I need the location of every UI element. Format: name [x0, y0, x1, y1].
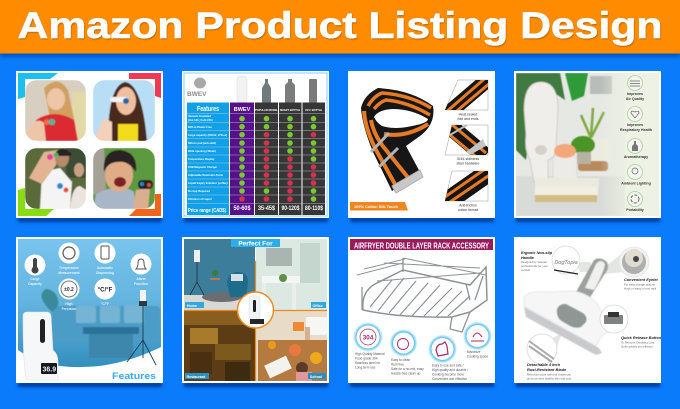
- table labels: Temperature Display: [188, 157, 215, 161]
- header banner: [0, 0, 680, 54]
- table labels: (Hot 12h; Cold 24h): [188, 118, 213, 122]
- text: quick release: To Remove Shedding Coat: [621, 340, 655, 344]
- text: convenient eyelet: Hook or hang in front rack: [624, 286, 657, 290]
- feature: celsius fahrenheit: [94, 278, 116, 306]
- features label: Features: [112, 371, 156, 382]
- text: convenient eyelet: Convenient Eyelet: [624, 277, 658, 282]
- text: quick release: Quite quickly and efficient: [621, 344, 653, 348]
- feature: easy to clean: Rust free: [391, 362, 404, 366]
- feature: alarm function: Function: [134, 282, 148, 286]
- feature: easy to use: Easy to use and safe /: [432, 364, 464, 368]
- photo: office: Office: [312, 304, 323, 308]
- benefit: air quality: Air Quality: [626, 97, 644, 101]
- benefit: aromatherapy: Aromatherapy: [624, 155, 648, 159]
- detail: heat sealed: [444, 80, 488, 120]
- table labels: Silicon pad (anti-skid): [188, 141, 216, 145]
- cross marks: [239, 132, 316, 202]
- photo: smiling boy: [93, 148, 155, 209]
- badge: cotton silk touch: 100% Cotton Silk Touch: [354, 204, 399, 209]
- benefit: portability: Portability: [626, 208, 644, 212]
- feature: 304 steel: Long term use: [355, 366, 376, 370]
- table labels: 35-45$: [258, 206, 276, 212]
- text: expanic handle: Designed by Veteran: [521, 260, 547, 264]
- table labels: BWEV: [234, 107, 251, 113]
- row separators: [187, 114, 325, 204]
- header banner: Amazon Product Listing Design: [18, 6, 664, 48]
- benefit: portability: [626, 192, 644, 212]
- feature: 304 steel: High Quality Material: [355, 352, 385, 356]
- perfect for tag: [231, 239, 280, 248]
- table labels: USB Magnetic Charger: [188, 165, 217, 169]
- benefit: aromatherapy: [624, 138, 648, 159]
- feature: large capacity: Large: [31, 277, 40, 281]
- feature: large capacity: [24, 254, 46, 286]
- table labels: Price range (CAD$): [188, 208, 226, 214]
- living room background: [18, 239, 161, 367]
- feature: automatic dispensing: [94, 242, 116, 275]
- benefit: ambient lighting: [621, 164, 651, 186]
- rack title: AIRFRYER DOUBLE LAYER RACK ACCESSORY: [354, 240, 489, 250]
- perfect for tag: Perfect For: [238, 240, 273, 248]
- panel: air purifying decor: [514, 71, 661, 218]
- tile shadows: [18, 217, 660, 387]
- dividers: [184, 261, 327, 381]
- check marks: [239, 116, 316, 202]
- table labels: Vacuum Insulated: [188, 114, 211, 118]
- feature: easy to use: Cooking become more: [432, 372, 464, 376]
- feature: cooking space: Maximize: [467, 350, 481, 354]
- product bottles: [237, 76, 317, 103]
- photo: man with spinner: [25, 148, 86, 209]
- table labels: Adjustable Reminder Alarm: [188, 173, 224, 177]
- text: convenient eyelet: For easy storage options: [624, 282, 655, 286]
- text: quick release: Quick Release Button: [621, 335, 662, 340]
- callout: release button detail: [600, 305, 628, 333]
- text: quick release: [621, 335, 662, 348]
- text: detachable blade: [527, 362, 571, 380]
- detail: anti-friction: Anti-friction: [459, 204, 477, 208]
- feature: large capacity: Capacity: [28, 282, 42, 286]
- photo: restaurant: [184, 311, 255, 381]
- photo: restaurant: Restaurant: [186, 375, 206, 379]
- table labels: 90-120$: [282, 206, 300, 212]
- buckle hardware: [371, 133, 423, 193]
- photo: office: [256, 239, 327, 310]
- feature: high precision: Precision: [62, 307, 76, 311]
- photo: home: Home: [187, 304, 197, 308]
- detail: heat sealed: Heat sealed: [459, 112, 477, 116]
- benefit: respiratory health: Improves: [627, 123, 643, 127]
- feature: celsius fahrenheit: °C/°F: [101, 302, 109, 306]
- center opening of loop: [374, 109, 428, 128]
- table labels: Filtration of Liquid: [188, 197, 212, 201]
- panel: dispenser features: [16, 237, 163, 383]
- feature: 304 steel: Stainless steel for: [355, 361, 381, 365]
- photo: girl in red: [25, 80, 86, 141]
- table backgrounds: [187, 102, 325, 215]
- feature: temperature measurement: [58, 242, 81, 275]
- rack illustration: [357, 258, 487, 332]
- photo: school: [256, 311, 327, 381]
- benefit: air quality: [626, 76, 644, 101]
- feature: easy to clean: Hassle-free clean up: [391, 372, 420, 376]
- dispenser badge: [238, 292, 274, 328]
- table labels: Features: [197, 104, 219, 113]
- detail: anti-friction: cotton thread: [458, 208, 478, 212]
- feature: easy to clean: Safe for a no-mix, easy: [391, 367, 424, 371]
- feature: 304 steel: 304: [363, 334, 374, 342]
- feature: celsius fahrenheit: °C/°F: [98, 288, 113, 294]
- feature: temperature measurement: Measurement: [58, 271, 81, 275]
- feature: high precision: High: [65, 302, 73, 306]
- table labels: Large capacity (500ml; 17fl.oz): [188, 133, 227, 137]
- table labels: [188, 104, 324, 214]
- panel: nylon watch strap: [348, 71, 496, 218]
- feature: alarm function: [130, 254, 152, 286]
- feature: temperature measurement: Temperature: [59, 266, 79, 270]
- text: expanic handle: comfort: [521, 268, 531, 272]
- text: expanic handle: Handle: [521, 255, 535, 260]
- text: expanic handle: professionals for your: [521, 264, 548, 268]
- table labels: Liquid Expiry Indicator (coffee): [188, 181, 228, 185]
- feature: automatic dispensing: Dispensing: [96, 271, 114, 275]
- detail: heat sealed: fold and ends: [457, 117, 479, 121]
- photo: home: [184, 239, 255, 310]
- rack title: [350, 239, 493, 250]
- photo: school: School: [310, 375, 322, 379]
- text: convenient eyelet: [624, 277, 658, 290]
- table labels: UV-C BOTTLE: [305, 108, 322, 112]
- tripod stand: [127, 306, 156, 365]
- table labels: SMART BOTTLE: [280, 108, 300, 112]
- feature: high precision: [58, 278, 80, 311]
- table labels: No App Required: [188, 189, 210, 193]
- table labels: 80-110$: [305, 206, 324, 212]
- callout: blade detail: [527, 334, 557, 364]
- detail: anti-friction: [444, 170, 488, 211]
- table labels: BPA & Plastic Free: [188, 125, 212, 129]
- header banner: Amazon Product Listing Design: [18, 5, 662, 46]
- table labels: POPULAR MODEL: [255, 108, 278, 112]
- panel: perfect for: [182, 237, 329, 383]
- brush illustration: [524, 258, 611, 355]
- detail: stainless hardware: [444, 123, 488, 166]
- dispenser device: 36.9: [42, 366, 56, 374]
- feature: automatic dispensing: Automatic: [97, 266, 113, 270]
- benefit: ambient lighting: Ambient Lighting: [621, 182, 651, 186]
- callout: handle detail: DogTopia: [554, 260, 578, 266]
- feature: easy to clean: Easy to clean: [391, 358, 410, 362]
- table labels: Wide opening (40mm): [188, 149, 216, 153]
- feature: high precision: ±0.2: [64, 287, 74, 293]
- text: detachable blade: and promotes healthy skin and coat: [527, 376, 571, 380]
- lifestyle photo: [516, 73, 659, 216]
- table labels: 50-60$: [234, 206, 251, 212]
- panel: airfryer rack: [348, 237, 495, 383]
- feature: alarm function: Alarm: [136, 277, 146, 281]
- feature: cooking space: [463, 322, 492, 358]
- callout: eyelet detail: [619, 247, 649, 277]
- colored corner accents: [18, 73, 161, 216]
- logo: BWEV: BWEV: [187, 91, 207, 98]
- detail: stainless hardware: steel hardware: [457, 162, 480, 166]
- benefit: respiratory health: Respiratory Health: [620, 128, 652, 132]
- panel: pet grooming tool: [514, 237, 662, 383]
- feature: easy to use: [428, 334, 468, 381]
- photo: girl in yellow: [93, 80, 155, 141]
- front band stripes: [364, 111, 428, 186]
- dispenser device: [23, 312, 58, 380]
- text: detachable blade: Detachable 4 Inch: [527, 362, 561, 367]
- strap illustration: [361, 88, 433, 193]
- panel: comparison table: [182, 71, 329, 218]
- panel: fidget spinner kids: [16, 71, 163, 218]
- text: detachable blade: Removes loose hair and Undercoat: [527, 372, 571, 376]
- text: expanic handle: [521, 250, 553, 272]
- logo: BWEV: [187, 78, 207, 98]
- feature: 304 steel: Food grade 304: [355, 356, 378, 360]
- badge: cotton silk touch: [350, 202, 408, 210]
- feature: easy to use: Convenient and effective: [432, 377, 467, 381]
- feature: easy to clean: [390, 329, 424, 376]
- back band stripes: [368, 93, 431, 115]
- callout: handle detail: [552, 246, 580, 274]
- benefit: respiratory health: [620, 106, 652, 132]
- text: expanic handle: Ergonic Non-slip: [521, 250, 553, 255]
- callout cones: [540, 252, 626, 352]
- feature: easy to use: High quality and durable /: [432, 368, 468, 372]
- benefit: air quality: Improves: [627, 92, 643, 96]
- text: detachable blade: Rust-Resistant Blade: [527, 367, 567, 372]
- detail: stainless hardware: 316L stainless: [457, 157, 479, 161]
- feature: 304 steel: [353, 322, 385, 370]
- feature: cooking space: Cooking space: [467, 354, 488, 358]
